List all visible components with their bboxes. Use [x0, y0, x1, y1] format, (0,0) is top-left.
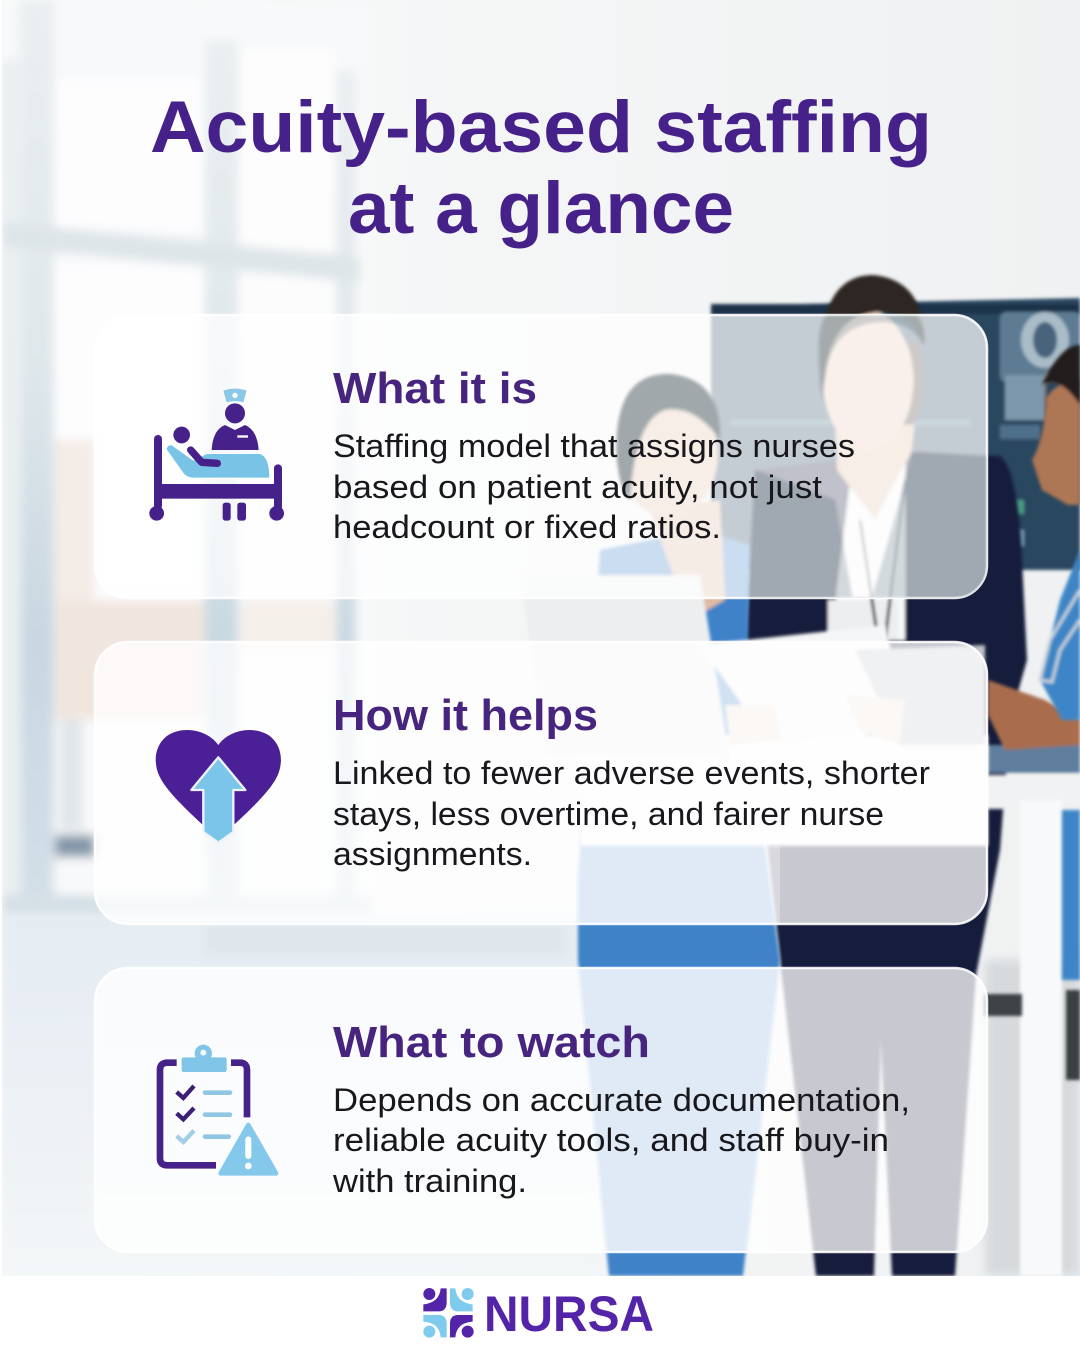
- scrubs lightening through the glass: [578, 968, 780, 1252]
- title: [150, 87, 932, 249]
- body text: Staffing model that assigns nurses: [333, 428, 855, 464]
- body text: [333, 755, 930, 872]
- icon: heart with up arrow: [156, 730, 281, 843]
- icon: logo mark: [423, 1288, 474, 1338]
- scrubs lightening through the glass: [578, 846, 780, 924]
- body text: headcount or fixed ratios.: [333, 509, 721, 545]
- chairs in the distance: [984, 990, 1080, 1080]
- body text: Linked to fewer adverse events, shorter: [333, 755, 930, 791]
- body text: stays, less overtime, and fairer nurse: [333, 796, 884, 832]
- title: at a glance: [348, 168, 734, 249]
- desk, laptop and tablet: [520, 575, 1080, 1276]
- icon: nurse at patient bed: [149, 389, 284, 521]
- woman in blazer: [745, 275, 1027, 1276]
- wordmark: NURSA: [484, 1286, 654, 1342]
- panel: what it is: [94, 314, 988, 600]
- heading: What it is: [333, 364, 537, 413]
- seated nurse in scrubs: [578, 374, 780, 1276]
- heading: What to watch: [333, 1018, 650, 1067]
- body text: [333, 428, 855, 545]
- panel: how it helps: [95, 642, 987, 924]
- logo: NURSA: [423, 1286, 654, 1342]
- right nurse with stethoscope: [1032, 345, 1080, 980]
- card background: [95, 968, 987, 1252]
- card background: [95, 315, 987, 598]
- people tint showing through the glass: [615, 315, 987, 598]
- body text: Depends on accurate documentation,: [333, 1082, 910, 1118]
- window: [0, 0, 372, 917]
- footer strip: [0, 1276, 1080, 1350]
- body text: based on patient acuity, not just: [333, 469, 822, 505]
- title: Acuity-based staffing: [150, 87, 932, 168]
- body text: with training.: [332, 1163, 527, 1199]
- body text: assignments.: [333, 836, 532, 872]
- panel: what to watch: [95, 968, 987, 1252]
- body text: [332, 1082, 910, 1199]
- card background: [95, 642, 987, 924]
- body text: reliable acuity tools, and staff buy-in: [333, 1122, 889, 1158]
- wall: [373, 0, 1080, 1276]
- wall monitor: [711, 298, 1080, 570]
- heading: How it helps: [333, 691, 598, 740]
- floor: [0, 915, 1080, 1276]
- icon: clipboard with warning triangle: [160, 1045, 276, 1173]
